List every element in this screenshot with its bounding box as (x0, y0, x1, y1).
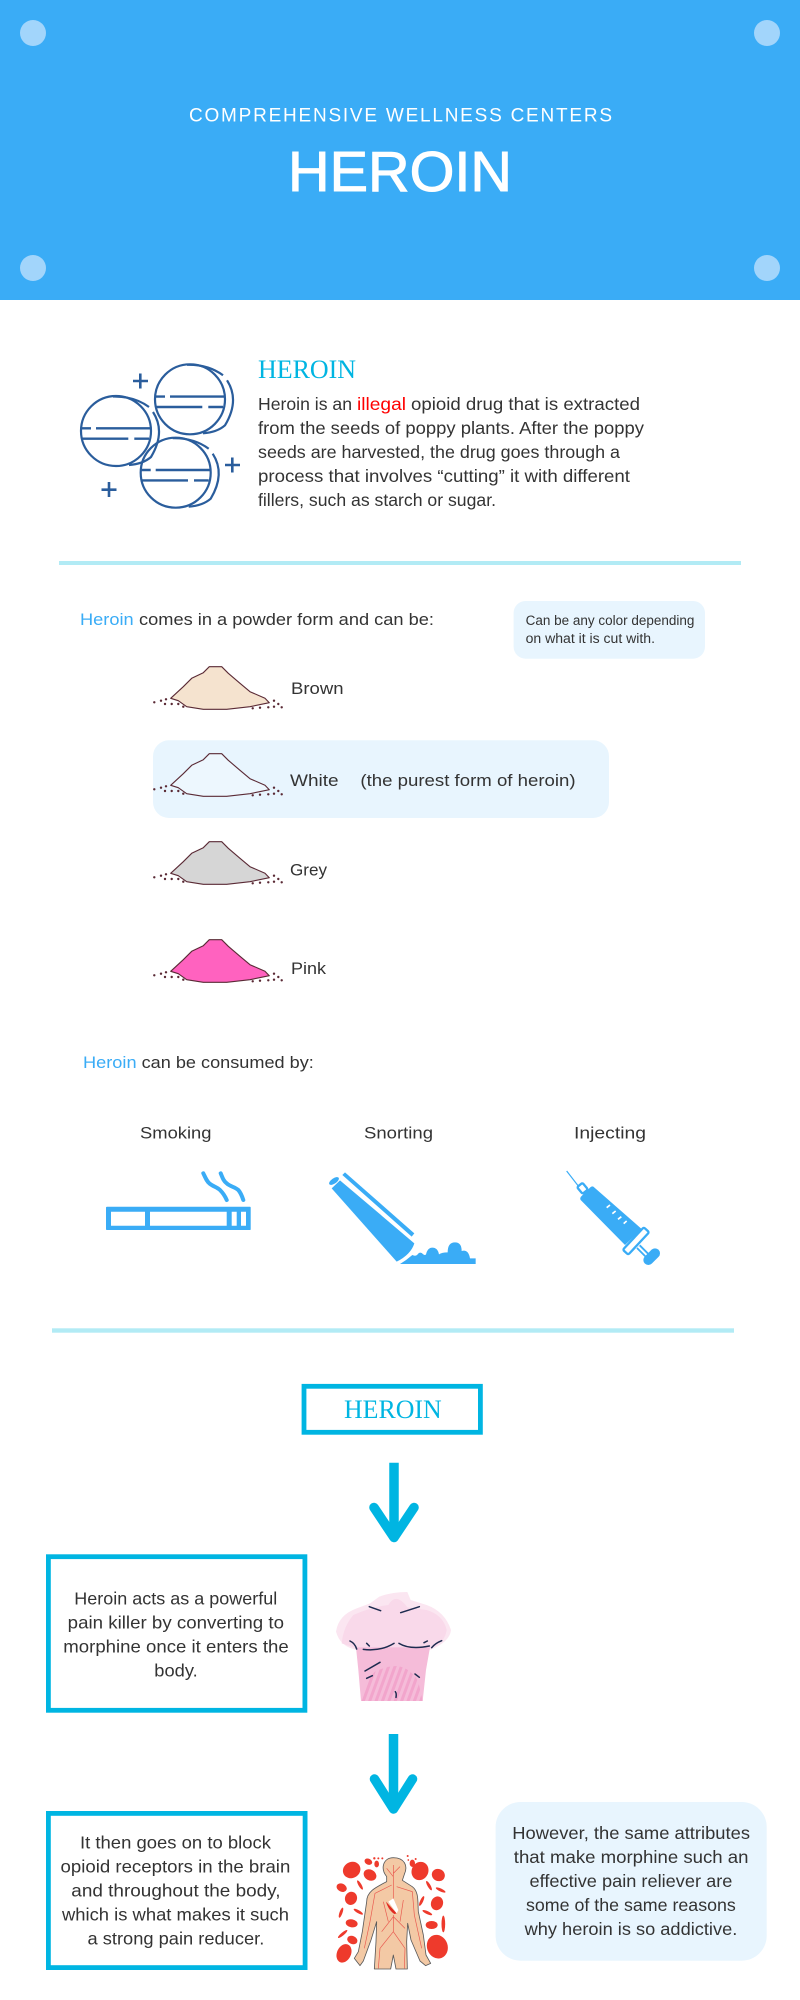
intro paragraph: process that involves “cutting” it with different (258, 466, 630, 486)
powder: brown: Brown (291, 679, 344, 698)
callout: any color (514, 601, 705, 659)
flow box: pain killer: body. (154, 1660, 198, 1680)
flow box: pain killer: pain killer by converting to (68, 1612, 284, 1632)
consumption intro text: can be consumed by: (142, 1053, 314, 1072)
flow box: receptors (48, 1813, 305, 1968)
powder intro text: comes in a powder form and can be: (139, 610, 434, 629)
title: HEROIN (288, 140, 512, 204)
intro paragraph: illegal (357, 394, 406, 414)
callout: addictive: that make morphine such an (514, 1847, 748, 1867)
powder: white highlighted: (the purest form of heroin) (360, 771, 576, 790)
consumption intro text: Heroin (83, 1053, 137, 1072)
label: smoking: Smoking (140, 1124, 212, 1143)
callout: addictive: why heroin is so addictive. (524, 1919, 737, 1939)
flow box: heroin (304, 1386, 480, 1432)
intro paragraph: fillers, such as starch or sugar. (258, 490, 496, 510)
powder: grey (153, 842, 327, 884)
icon: pills (81, 364, 240, 508)
label: injecting: Injecting (574, 1124, 646, 1143)
label: snorting: Snorting (364, 1124, 433, 1143)
heading: heroin: HEROIN (258, 355, 356, 384)
callout: any color: Can be any color depending (526, 613, 694, 628)
intro paragraph (258, 394, 644, 510)
powder: brown (153, 667, 344, 710)
callout: addictive: However, the same attributes (512, 1823, 750, 1843)
callout: any color: on what it is cut with. (526, 631, 655, 646)
powder intro text: Heroin (80, 610, 134, 629)
icon: snorting (328, 1172, 476, 1264)
powder: white highlighted (153, 740, 609, 818)
powder: grey: Grey (290, 861, 327, 880)
callout: addictive: effective pain reliever are (530, 1871, 732, 1891)
flow box: receptors: which is what makes it such (61, 1904, 289, 1924)
flow box: pain killer: Heroin acts as a powerful (74, 1588, 277, 1608)
flow box: pain killer (48, 1557, 305, 1710)
powder: pink (153, 940, 327, 982)
flow box: receptors: opioid receptors in the brain (60, 1856, 290, 1876)
icon: body with blood cells (334, 1855, 451, 1969)
flow box: heroin: HEROIN (344, 1395, 442, 1424)
flow box: receptors: a strong pain reducer. (88, 1928, 264, 1948)
icon: cigarette (106, 1173, 251, 1230)
header corner dots (20, 20, 780, 281)
flow box: receptors: and throughout the body, (71, 1880, 280, 1900)
arrow: down 2 (374, 1734, 412, 1809)
callout: addictive (496, 1802, 767, 1961)
flow box: pain killer: morphine once it enters the (63, 1636, 289, 1656)
flow box: receptors: It then goes on to block (80, 1832, 271, 1852)
powder: white highlighted: White (290, 771, 339, 790)
icon: torso (336, 1592, 451, 1701)
icon: syringe (567, 1171, 655, 1260)
header subtitle: COMPREHENSIVE WELLNESS CENTERS (189, 106, 612, 126)
intro paragraph: Heroin is an (258, 394, 352, 414)
header banner (0, 0, 800, 300)
intro paragraph: from the seeds of poppy plants. After the poppy (258, 418, 644, 438)
callout: addictive: some of the same reasons (526, 1895, 736, 1915)
intro paragraph: seeds are harvested, the drug goes through a (258, 442, 620, 462)
arrow: down 1 (374, 1463, 414, 1538)
powder: pink: Pink (291, 959, 327, 978)
intro paragraph: opioid drug that is extracted (411, 394, 640, 414)
